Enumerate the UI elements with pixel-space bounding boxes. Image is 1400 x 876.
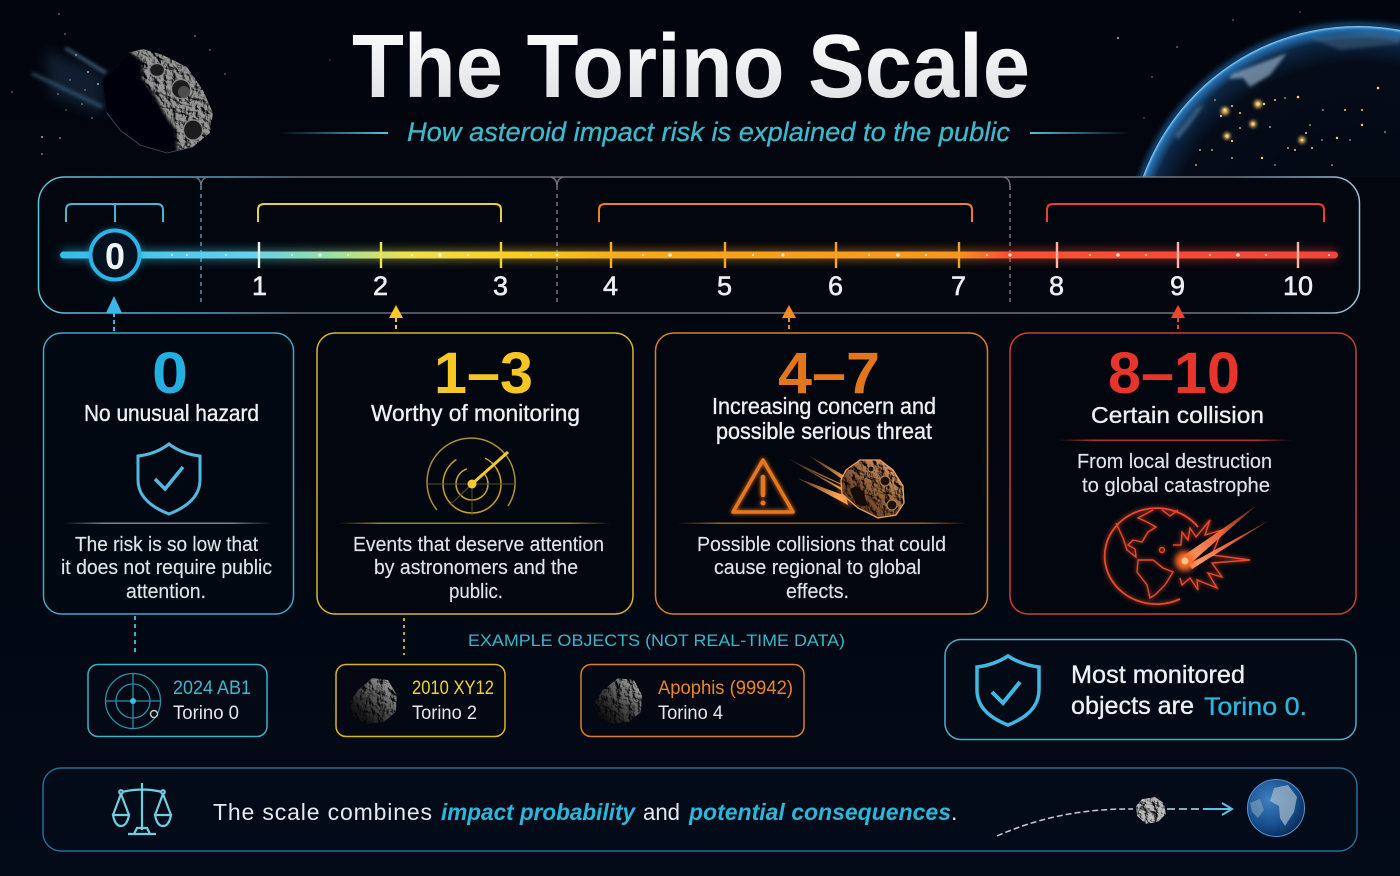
panel: rating 0 — [44, 333, 294, 614]
text block: it does not require public — [61, 556, 272, 579]
tick labels: 4 — [603, 271, 618, 301]
icon: flaming asteroid — [785, 455, 904, 518]
arrow: one to three — [389, 305, 403, 332]
number 4-7: 4–7 — [778, 341, 880, 406]
stars — [11, 11, 1301, 155]
gradient scale line — [60, 250, 1338, 260]
callout: most monitored objects: Most monitored — [1071, 661, 1245, 689]
example: 2024 AB1: Torino 0 — [173, 703, 239, 724]
panel: scale timeline — [38, 177, 1360, 313]
icon: globe impact — [1105, 505, 1270, 604]
example: Apophis: Apophis (99942) — [658, 678, 793, 699]
icon: small earth — [1248, 780, 1304, 836]
panel: bottom summary — [43, 768, 1357, 851]
heading: certain collision: Certain collision — [1091, 402, 1264, 428]
trajectory arrow — [997, 803, 1232, 836]
text block: to global catastrophe — [1082, 474, 1270, 497]
summary sentence: and — [643, 799, 680, 825]
example: Apophis: Torino 4 — [658, 703, 723, 724]
summary sentence: . — [951, 799, 957, 825]
icon: asteroid — [350, 678, 397, 724]
example: 2010 XY12: 2010 XY12 — [412, 678, 494, 699]
text block: cause regional to global — [714, 556, 921, 579]
tick labels: 3 — [493, 271, 508, 301]
callout: most monitored objects — [945, 640, 1356, 740]
tick labels: 7 — [951, 271, 966, 301]
text block: effects. — [786, 580, 849, 603]
arrow: four to seven — [782, 305, 796, 332]
tick labels: 5 — [717, 271, 732, 301]
icon: shield check — [977, 656, 1039, 725]
summary sentence: impact probability — [441, 799, 636, 825]
example: 2010 XY12: Torino 2 — [412, 703, 477, 724]
arrow: eight to ten — [1171, 305, 1185, 332]
tick labels — [252, 271, 1313, 301]
icon: asteroid — [595, 678, 642, 724]
text block: Events that deserve attention — [353, 533, 604, 556]
heading: example objects: EXAMPLE OBJECTS (NOT REAL-TIME DATA) — [468, 631, 845, 650]
icon: balance scales — [113, 783, 171, 834]
summary sentence: The scale combines — [213, 799, 432, 825]
number 1-3: 1–3 — [434, 341, 533, 406]
title: The Torino Scale — [352, 17, 1030, 117]
panel: rating 8-10 — [1010, 333, 1356, 614]
tick marks — [259, 242, 1298, 268]
heading: increasing concern: possible serious threat — [716, 418, 933, 444]
earth: top right — [1136, 18, 1400, 176]
text block: Possible collisions that could — [697, 533, 946, 556]
asteroid: top left with dust tail — [31, 47, 213, 158]
heading: increasing concern: Increasing concern and — [712, 393, 936, 419]
summary sentence — [213, 799, 957, 825]
marker: zero: 0 — [105, 236, 125, 277]
number 0: 0 — [152, 341, 188, 406]
connector: rating 0 to example — [134, 616, 136, 655]
example: Apophis — [581, 664, 804, 736]
tick labels: 6 — [828, 271, 843, 301]
heading: no unusual hazard: No unusual hazard — [84, 400, 259, 426]
arrow: zero — [106, 296, 122, 333]
tick labels: 8 — [1049, 271, 1064, 301]
icon: target radar — [105, 673, 160, 729]
example: 2024 AB1 — [88, 664, 267, 736]
text block — [697, 533, 946, 603]
text block — [1077, 450, 1272, 497]
summary sentence: potential consequences — [688, 799, 951, 825]
text block — [61, 533, 272, 603]
example: 2010 XY12 — [336, 664, 505, 736]
icon: small asteroid — [1136, 797, 1166, 824]
subtitle: How asteroid impact risk is explained to the public — [407, 117, 1010, 147]
connector: rating 1-3 to example — [403, 618, 405, 655]
number 8-10: 8–10 — [1108, 341, 1240, 406]
text block — [353, 533, 604, 603]
heading: worthy of monitoring: Worthy of monitoring — [371, 400, 580, 426]
heading: increasing concern — [712, 393, 936, 444]
icon: warning triangle — [733, 460, 793, 512]
text block: From local destruction — [1077, 450, 1272, 473]
text block: public. — [449, 580, 503, 603]
tick labels: 2 — [373, 271, 388, 301]
marker: zero — [87, 227, 143, 283]
example: 2024 AB1: 2024 AB1 — [173, 678, 251, 699]
tick labels: 10 — [1283, 271, 1313, 301]
icon: radar — [427, 438, 516, 515]
panel: rating 4-7 — [656, 333, 988, 614]
text block: The risk is so low that — [75, 533, 258, 556]
callout: most monitored objects: Torino 0. — [1204, 693, 1307, 721]
text block: attention. — [126, 580, 206, 603]
tick labels: 1 — [252, 271, 267, 301]
panel: rating 1-3 — [317, 333, 633, 614]
range brackets — [66, 204, 1324, 222]
icon: shield check — [138, 444, 200, 514]
callout: most monitored objects: objects are — [1071, 692, 1194, 720]
text block: by astronomers and the — [374, 556, 578, 579]
tick labels: 9 — [1170, 271, 1185, 301]
